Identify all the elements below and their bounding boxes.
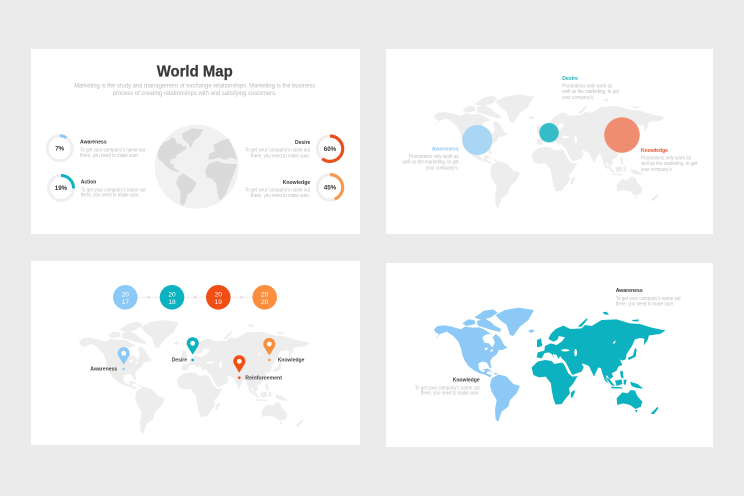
panel: globe overview bbox=[31, 49, 360, 234]
year 2019: 20 bbox=[215, 291, 222, 298]
label: awareness: your company's. bbox=[426, 166, 459, 172]
donut: awareness 7% bbox=[47, 136, 72, 161]
pin: knowledge bbox=[263, 338, 275, 361]
label: awareness bbox=[402, 147, 459, 172]
label: awareness: Awareness bbox=[616, 288, 643, 294]
label: awareness: Awareness bbox=[90, 366, 117, 372]
pin: awareness bbox=[118, 347, 130, 370]
bubble: knowledge bbox=[604, 117, 640, 153]
donut: desire 60% bbox=[317, 136, 343, 161]
year 2020: 20 bbox=[261, 299, 269, 306]
label: knowledge: your company's. bbox=[641, 167, 673, 173]
label: knowledge: Knowledge bbox=[278, 357, 304, 363]
label: action: there, you need to make sure. bbox=[81, 193, 140, 199]
label: action: Action bbox=[81, 179, 97, 185]
label: desire: there, you need to make sure. bbox=[251, 153, 310, 159]
label: knowledge bbox=[245, 180, 311, 199]
label: desire bbox=[245, 140, 311, 159]
year 2020: 20 bbox=[261, 291, 269, 298]
label: desire: Promotions only work as bbox=[562, 83, 613, 89]
label: knowledge: To get your company's name out bbox=[415, 385, 480, 391]
label: awareness bbox=[616, 288, 681, 307]
label: knowledge: Promotions only work as bbox=[641, 155, 691, 161]
label: desire: To get your company's name out bbox=[245, 148, 311, 154]
label: awareness: Awareness bbox=[80, 140, 107, 146]
year 2019 bbox=[206, 285, 231, 310]
label: desire bbox=[562, 76, 620, 101]
year 2018 bbox=[160, 285, 184, 310]
world map: grey bbox=[79, 320, 311, 434]
bubble: desire bbox=[539, 123, 559, 142]
world map: eurasia, africa, oceania bbox=[532, 312, 666, 414]
label: awareness: Promotions only work as bbox=[409, 154, 459, 160]
timeline connectors bbox=[137, 296, 253, 298]
label: action: To get your company's name out bbox=[81, 187, 146, 193]
pin: reinforcement bbox=[233, 355, 245, 379]
title: World Map bbox=[157, 63, 233, 80]
donut: knowledge 45% bbox=[317, 175, 343, 200]
label: awareness: there, you need to make sure. bbox=[80, 153, 139, 159]
label: knowledge: To get your company's name out bbox=[245, 188, 311, 194]
panel: timeline and pins bbox=[31, 261, 360, 445]
donut: action 19% bbox=[48, 176, 74, 200]
label: desire: well as the marketing, to get bbox=[562, 89, 620, 95]
intro text bbox=[74, 83, 315, 97]
year 2017: 20 bbox=[122, 291, 129, 298]
bubble: awareness bbox=[462, 125, 492, 155]
intro text: Marketing is the study and management of exchange relationships. Marketing is the business bbox=[74, 83, 315, 90]
donut: desire 60%: 60% bbox=[324, 146, 337, 153]
year 2020 bbox=[252, 285, 277, 310]
label: awareness bbox=[80, 140, 146, 159]
label: knowledge: there, you need to make sure. bbox=[251, 193, 310, 199]
label: awareness: well as the marketing, to get bbox=[402, 160, 459, 166]
label: desire: Desire bbox=[295, 140, 310, 146]
label: knowledge: Knowledge bbox=[641, 148, 669, 154]
label: knowledge bbox=[641, 148, 698, 173]
panel: bubble map bbox=[386, 49, 713, 234]
label: awareness: Awareness bbox=[432, 147, 459, 153]
world map: americas bbox=[434, 308, 535, 422]
panel: coloured map bbox=[386, 263, 713, 447]
label: knowledge bbox=[415, 378, 480, 397]
label: reinforcement: Reinforcement bbox=[245, 376, 282, 382]
label: knowledge: well as the marketing, to get bbox=[641, 161, 698, 167]
label: awareness: To get your company's name out bbox=[616, 296, 681, 302]
year 2017: 17 bbox=[122, 299, 129, 306]
globe bbox=[155, 125, 239, 209]
donut: knowledge 45%: 45% bbox=[324, 184, 337, 192]
label: awareness: To get your company's name out bbox=[80, 147, 146, 153]
year 2018: 20 bbox=[168, 291, 176, 298]
label: knowledge: Knowledge bbox=[453, 378, 480, 384]
label: awareness: there, you need to make sure. bbox=[616, 301, 674, 307]
intro text: process of creating relationships with and satisfying customers. bbox=[113, 90, 277, 97]
year 2017 bbox=[113, 285, 138, 310]
label: action bbox=[81, 179, 146, 199]
year 2019: 19 bbox=[215, 299, 222, 306]
label: knowledge: there, you need to make sure. bbox=[421, 391, 480, 397]
label: desire: your company's. bbox=[562, 95, 594, 101]
label: desire: Desire bbox=[562, 76, 579, 82]
donut: awareness 7%: 7% bbox=[55, 146, 65, 153]
label: knowledge: Knowledge bbox=[283, 180, 310, 186]
label: desire: Desire bbox=[172, 357, 187, 363]
pin: desire bbox=[187, 337, 199, 361]
world map: grey bbox=[434, 94, 666, 208]
donut: action 19%: 19% bbox=[55, 185, 68, 192]
year 2018: 18 bbox=[168, 299, 176, 306]
